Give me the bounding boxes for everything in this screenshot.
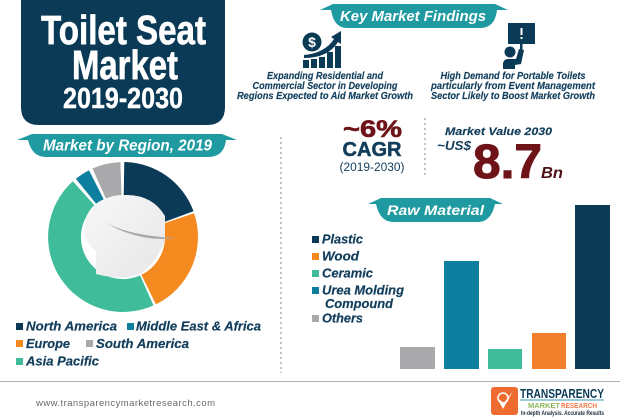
stat: market value: Bn — [541, 165, 563, 182]
icon: money growth — [302, 31, 341, 68]
stat: CAGR: ~6% — [343, 116, 402, 143]
heading: key market findings — [320, 4, 508, 28]
legend: regions: North America — [26, 320, 117, 334]
legend: raw material — [312, 232, 404, 326]
finding: portable toilets: High Demand for Portable Toilets — [440, 71, 586, 82]
legend: regions: Asia Pacific — [25, 354, 99, 368]
legend: raw material: Compound — [325, 297, 393, 311]
icon: person holding sign — [503, 23, 535, 69]
stat: market value: 8.7 — [473, 136, 542, 189]
icon: toilet — [84, 195, 176, 278]
heading: key market findings: Key Market Findings — [340, 8, 486, 25]
legend: raw material: Ceramic — [322, 266, 373, 280]
stat: market value — [437, 126, 563, 189]
title panel — [21, 0, 225, 125]
stat: CAGR — [340, 116, 405, 174]
website url: www.transparencymarketresearch.com — [35, 398, 215, 409]
heading: raw material: Raw Material — [387, 202, 485, 218]
title panel: 2019-2030 — [63, 83, 183, 115]
legend: regions: Europe — [26, 337, 70, 351]
stat: market value: ~US$ — [437, 139, 472, 153]
legend: regions: Middle East & Africa — [136, 320, 261, 334]
donut chart: market by region — [48, 162, 198, 312]
icon: money growth: $ — [308, 34, 316, 50]
logo: transparency market research: In-depth Analysis. Accurate Results — [521, 411, 605, 417]
title panel: Toilet Seat — [41, 7, 206, 53]
legend: raw material: Others — [322, 312, 363, 326]
heading: market by region — [17, 134, 237, 157]
stat: CAGR: CAGR — [342, 139, 402, 161]
finding: portable toilets — [430, 71, 596, 102]
stat: market value: Market Value 2030 — [445, 126, 553, 138]
finding: portable toilets: Sector Likely to Boost Market Growth — [431, 91, 595, 102]
logo: transparency market research: MARKET — [528, 403, 561, 410]
legend: regions: South America — [96, 337, 189, 351]
finding: portable toilets: particularly from Event Management — [430, 81, 596, 92]
heading: market by region: Market by Region, 2019 — [43, 138, 212, 154]
finding: residential and commercial — [237, 71, 413, 102]
title panel: Market — [72, 42, 178, 88]
finding: residential and commercial: Regions Expected to Aid Market Growth — [237, 91, 413, 102]
stat: CAGR: (2019-2030) — [340, 162, 405, 174]
finding: residential and commercial: Expanding Residential and — [267, 71, 384, 82]
logo: transparency market research — [491, 386, 605, 417]
finding: residential and commercial: Commercial Sector in Developing — [252, 81, 398, 92]
bar chart: raw material — [400, 205, 610, 369]
heading: raw material — [368, 198, 503, 222]
legend: raw material: Wood — [322, 250, 359, 264]
legend: regions — [16, 320, 261, 368]
legend: raw material: Plastic — [322, 232, 363, 246]
logo: transparency market research: RESEARCH — [561, 403, 597, 410]
legend: raw material: Urea Molding — [322, 284, 404, 298]
